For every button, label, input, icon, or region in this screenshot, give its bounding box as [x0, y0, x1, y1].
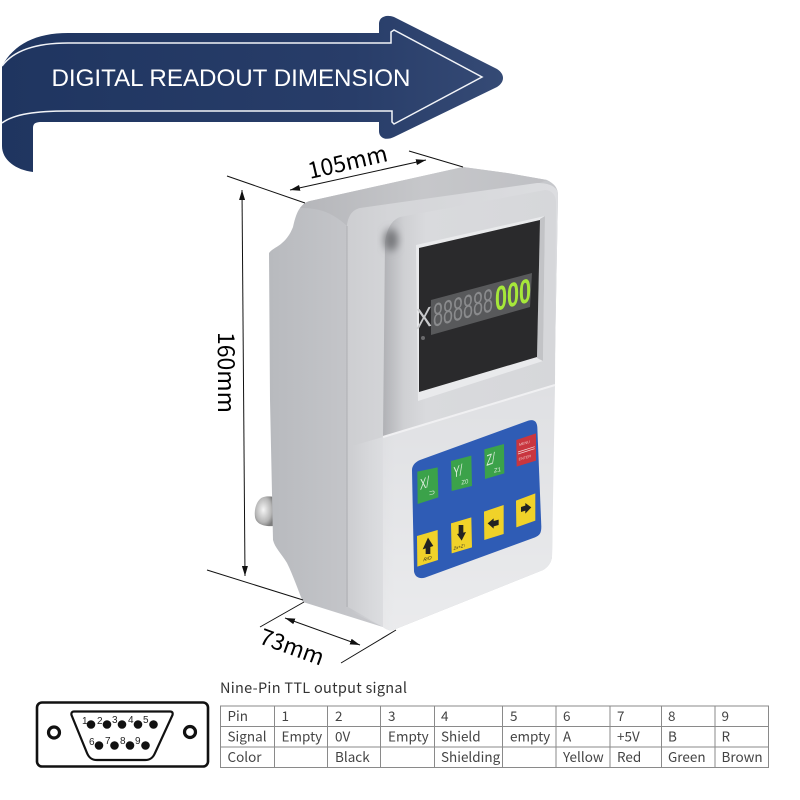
pin table: empty — [510, 726, 550, 746]
keypad — [412, 420, 541, 578]
inactive digits: 888888 — [433, 282, 493, 335]
down arrow key: 2x+Z↑ — [453, 543, 466, 551]
pin table: Empty — [282, 726, 322, 746]
device side casing and silhouette — [269, 167, 558, 630]
connector diagram: nine-pin: 8 — [120, 736, 126, 747]
connector diagram: nine-pin: 6 — [89, 737, 95, 748]
connector diagram: nine-pin: 2 — [97, 716, 103, 727]
Y key: Z0 — [461, 479, 469, 487]
Y key — [451, 456, 472, 491]
pin table: 8 — [668, 705, 676, 725]
active green digits: 000 — [495, 272, 531, 319]
mounting nut — [255, 496, 274, 526]
pin table: 0V — [335, 726, 350, 746]
Y key: Y/ — [453, 460, 463, 482]
pin table: 2 — [335, 705, 342, 725]
down arrow key — [451, 517, 472, 553]
dimension: 105mm — [227, 134, 463, 203]
pin table: 3 — [388, 705, 396, 725]
menu enter key — [516, 433, 536, 467]
right arrow key — [516, 493, 535, 527]
product: digital readout device — [255, 167, 558, 630]
connector diagram: nine-pin: 4 — [128, 715, 134, 726]
connector diagram: nine-pin: 5 — [143, 715, 149, 726]
menu enter key: ENTER — [519, 454, 531, 462]
dimension: 160mm — [207, 190, 303, 600]
X key — [417, 467, 438, 504]
Z key: Z/ — [486, 449, 495, 470]
pin table: Pin — [228, 705, 248, 725]
pin table: Black — [335, 746, 370, 766]
lower keypad panel — [352, 385, 555, 630]
axis label: X — [416, 300, 432, 335]
X key: X/ — [420, 472, 429, 494]
connector diagram: nine-pin: 9 — [135, 736, 141, 747]
pin table: Yellow — [562, 746, 604, 766]
connector diagram: nine-pin: 1 — [82, 716, 88, 727]
readout strip — [431, 273, 532, 335]
pin table: R — [722, 726, 730, 746]
pin table: +5V — [617, 726, 640, 746]
pin table: Shielding — [441, 746, 501, 766]
left arrow key — [484, 505, 504, 540]
device front casing — [347, 183, 558, 630]
connector diagram: nine-pin — [37, 702, 208, 766]
menu enter key: MENU — [519, 440, 530, 447]
pin table — [220, 705, 769, 768]
pin table: 9 — [722, 705, 729, 725]
screen icon dot — [421, 336, 425, 340]
X key: ⊃ — [429, 488, 435, 498]
pin table: 1 — [282, 705, 289, 725]
pin table: A — [563, 726, 572, 746]
pin table: Brown — [722, 746, 763, 766]
dimension: 73mm — [256, 602, 396, 672]
pin table: Empty — [388, 726, 429, 746]
connector diagram: nine-pin: 7 — [105, 736, 111, 747]
pin table: Shield — [441, 726, 481, 746]
up arrow key — [417, 530, 438, 567]
title text: DIGITAL READOUT DIMENSION — [52, 65, 410, 92]
Z key: Z1 — [494, 467, 502, 475]
dimension: 105mm: 105mm — [304, 134, 390, 186]
dimension: 73mm: 73mm — [256, 620, 329, 672]
pin table: 5 — [510, 705, 518, 725]
up arrow key: R/O — [423, 555, 432, 563]
pin table: 7 — [617, 705, 624, 725]
pin table: Red — [617, 746, 641, 766]
display screen — [416, 216, 545, 401]
pin table: 6 — [563, 705, 570, 725]
Z key — [484, 444, 504, 479]
device top surface — [300, 167, 547, 226]
dimension: 160mm: 160mm — [211, 332, 245, 413]
pin table: Green — [668, 746, 706, 766]
title banner arrow — [2, 16, 503, 172]
connector diagram: nine-pin: 3 — [112, 715, 118, 726]
upper recessed panel — [383, 190, 556, 437]
pin table: Color — [228, 746, 262, 766]
table heading: Nine-Pin TTL output signal — [220, 677, 407, 698]
pin table: 4 — [441, 705, 449, 725]
pin table: Signal — [228, 726, 267, 746]
pin table: B — [668, 726, 677, 746]
